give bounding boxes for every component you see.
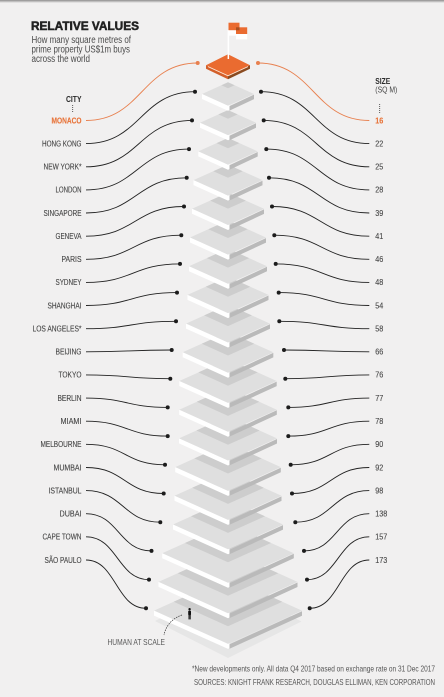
city labels: GENEVA (56, 232, 82, 241)
plate: New York (200, 110, 256, 140)
city labels: TOKYO (58, 371, 82, 380)
plate: Sao Paulo (154, 577, 302, 649)
plate: Berlin (179, 388, 277, 437)
plate: Shanghai (188, 277, 268, 318)
callout: human at scale: HUMAN AT SCALE (108, 638, 165, 647)
plate: Dubai (162, 524, 294, 588)
city labels: BEIJING (56, 348, 82, 357)
right connectors (256, 61, 369, 610)
city labels (32, 116, 82, 565)
icon: human figure (188, 608, 191, 619)
city column heading: CITY (66, 95, 82, 104)
size values: 90 (375, 440, 384, 449)
shadow under base plate (155, 584, 302, 658)
plate: Istanbul (173, 500, 283, 554)
plate: Mumbai (174, 472, 282, 525)
city labels: DUBAI (60, 510, 82, 518)
plate: Monaco (orange) (206, 54, 250, 79)
city labels: MIAMI (60, 417, 82, 426)
size values: 22 (375, 139, 384, 148)
size values: 48 (375, 278, 384, 287)
size values: 46 (375, 255, 384, 264)
city labels: SYDNEY (56, 278, 82, 287)
subtitle (32, 35, 131, 65)
subtitle: How many square metres of (32, 35, 131, 46)
plate: Sydney (189, 249, 267, 289)
left connectors (86, 61, 200, 610)
plate: Miami (179, 416, 277, 466)
plate: Los Angeles (186, 305, 270, 348)
city labels: PARIS (62, 255, 82, 264)
city labels: SINGAPORE (44, 209, 82, 218)
size values: 157 (375, 533, 388, 542)
size values: 173 (375, 556, 388, 565)
size column heading: (SQ M) (375, 86, 398, 94)
city labels: MONACO (52, 116, 82, 125)
size values: 58 (375, 324, 384, 334)
size values: 98 (375, 486, 384, 495)
plate: Geneva (192, 193, 264, 230)
city labels: MUMBAI (54, 463, 82, 472)
callout arrow: human at scale (164, 615, 182, 635)
plate: London (198, 138, 258, 170)
size values: 138 (375, 510, 388, 518)
plate: Hong Kong (202, 82, 254, 111)
city labels: SHANGHAI (48, 301, 82, 310)
size values: 54 (375, 301, 384, 310)
size values: 76 (375, 371, 384, 380)
plate: Melbourne (175, 443, 281, 496)
city labels: LONDON (56, 186, 82, 195)
city column heading (66, 95, 82, 113)
size values: 92 (375, 463, 384, 472)
size values: 66 (375, 348, 384, 357)
size values: 77 (375, 394, 384, 403)
subtitle: prime property US$1m buys (32, 44, 130, 56)
size values: 39 (375, 209, 384, 218)
plate: Tokyo (179, 359, 277, 408)
size column heading (375, 77, 398, 113)
size values: 28 (375, 186, 384, 195)
size column heading: SIZE (375, 77, 391, 86)
size values (375, 116, 388, 565)
plate: Cape Town (158, 551, 298, 618)
icon: flag (228, 23, 247, 59)
city labels: LOS ANGELES* (32, 324, 82, 334)
stacked plates (154, 23, 302, 658)
size values: 78 (375, 417, 384, 426)
city labels: CAPE TOWN (42, 533, 82, 542)
plate: Singapore (194, 165, 262, 201)
size values: 16 (375, 116, 384, 125)
subtitle: across the world (32, 54, 90, 65)
city labels: MELBOURNE (40, 440, 82, 449)
plate: Beijing (183, 332, 273, 378)
city labels: SÃO PAULO (44, 555, 82, 565)
city labels: HONG KONG (42, 139, 82, 148)
plate: Paris (190, 220, 266, 260)
size values: 25 (375, 163, 384, 172)
title: RELATIVE VALUES (31, 21, 139, 33)
city labels: BERLIN (58, 394, 82, 403)
size values: 41 (375, 232, 384, 241)
city labels: NEW YORK* (44, 163, 82, 172)
city labels: ISTANBUL (48, 486, 82, 495)
